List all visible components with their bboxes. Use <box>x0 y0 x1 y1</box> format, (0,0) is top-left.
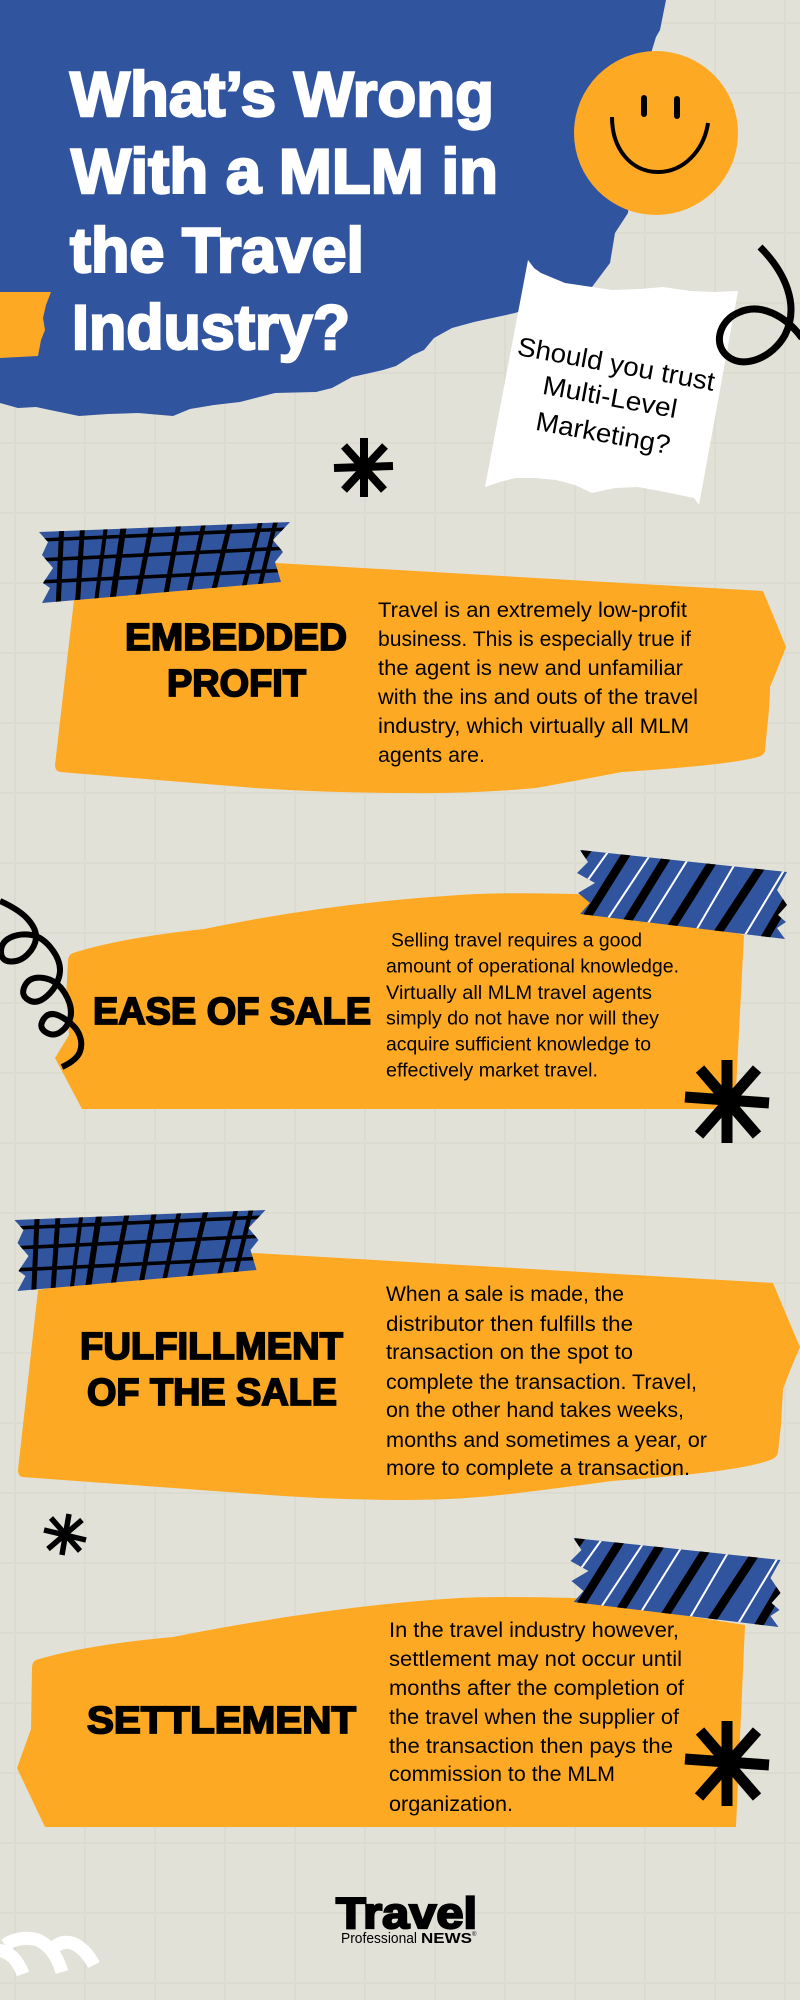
heading: embedded profit <box>125 617 347 705</box>
orange card 2 <box>55 893 744 1109</box>
text: embedded profit body: the agent is new and unfamiliar <box>378 656 683 680</box>
icon: small asterisk <box>44 1514 86 1555</box>
icon: blue grid tape <box>39 522 290 603</box>
heading: settlement: SETTLEMENT <box>87 1700 356 1742</box>
icon: smiley face <box>574 51 738 215</box>
text: ease of sale body: Selling travel requires a good <box>391 930 642 952</box>
orange card 3 <box>18 1253 800 1500</box>
text: embedded profit body: business. This is especially true if <box>378 627 691 651</box>
heading: fulfillment of the sale: FULFILLMENT <box>80 1326 343 1368</box>
orange card 4 <box>17 1597 745 1827</box>
text: settlement body: months after the completion of <box>389 1677 684 1700</box>
icon: blue grid tape <box>14 1210 266 1291</box>
text: settlement body <box>389 1619 684 1816</box>
icon: blue striped tape <box>570 1534 784 1629</box>
text: fulfillment body: more to complete a transaction. <box>386 1457 690 1480</box>
text: settlement body: the travel when the supplier of <box>389 1706 679 1729</box>
text: settlement body: organization. <box>389 1793 513 1816</box>
text: fulfillment body: distributor then fulfills the <box>386 1313 633 1336</box>
callout: torn white note: Marketing? <box>534 406 673 460</box>
title: With a MLM in <box>71 137 498 207</box>
text: settlement body: the transaction then pays the <box>389 1735 673 1758</box>
text: fulfillment body <box>386 1283 707 1480</box>
text: fulfillment body: complete the transaction. Travel, <box>386 1371 697 1394</box>
icon: large asterisk <box>685 1060 769 1143</box>
text: embedded profit body: Travel is an extremely low-profit <box>378 598 687 622</box>
icon: asterisk under header <box>334 438 393 497</box>
logo: Travel Professional News: Professional <box>341 1931 417 1947</box>
text: ease of sale body: amount of operational knowledge. <box>386 956 679 978</box>
text: settlement body: settlement may not occur until <box>389 1648 682 1671</box>
text: fulfillment body: on the other hand takes weeks, <box>386 1399 684 1422</box>
callout: torn white note: Multi-Level <box>540 370 680 424</box>
icon: orange tape at left of header <box>0 292 51 358</box>
text: ease of sale body: simply do not have nor will they <box>386 1008 659 1030</box>
title: What’s Wrong <box>70 60 494 130</box>
text: fulfillment body: months and sometimes a year, or <box>386 1429 707 1452</box>
icon: black curl by note <box>719 247 800 362</box>
icon: black spiral at left <box>0 901 81 1067</box>
text: embedded profit body: agents are. <box>378 743 485 767</box>
text: ease of sale body: effectively market travel. <box>386 1060 598 1082</box>
icon: large asterisk <box>685 1721 769 1806</box>
text: embedded profit body: industry, which virtually all MLM <box>378 714 689 738</box>
panel: fulfillment of the sale <box>14 1204 800 1500</box>
text: embedded profit body <box>377 598 698 767</box>
logo: Travel Professional News: Travel <box>336 1889 477 1938</box>
heading: embedded profit: EMBEDDED <box>125 617 347 659</box>
callout: torn white note: Should you trust <box>515 331 718 397</box>
heading: fulfillment of the sale: OF THE SALE <box>87 1372 337 1414</box>
heading: embedded profit: PROFIT <box>167 663 306 705</box>
panel: embedded profit <box>38 516 786 793</box>
panel: torn blue header <box>0 0 666 416</box>
panel: ease of sale <box>55 846 790 1143</box>
orange card 1 <box>55 563 786 793</box>
text: embedded profit body: with the ins and outs of the travel <box>377 685 698 709</box>
text: ease of sale body: acquire sufficient knowledge to <box>386 1034 651 1056</box>
heading: ease of sale: EASE OF SALE <box>93 991 371 1033</box>
logo: Travel Professional News: ® <box>472 1931 477 1938</box>
text: fulfillment body: When a sale is made, the <box>386 1283 624 1306</box>
text: settlement body: commission to the MLM <box>389 1763 615 1786</box>
logo: Travel Professional News: NEWS <box>421 1931 472 1947</box>
icon: blue striped tape <box>577 846 790 941</box>
heading: fulfillment of the sale <box>80 1326 343 1414</box>
icon: white squiggle bottom left <box>0 1938 94 1974</box>
text: ease of sale body <box>386 930 679 1082</box>
text: ease of sale body: Virtually all MLM travel agents <box>386 982 652 1004</box>
title: the Travel <box>70 216 364 286</box>
text: settlement body: In the travel industry however, <box>389 1619 679 1642</box>
panel: settlement <box>17 1534 784 1827</box>
text: fulfillment body: transaction on the spot to <box>386 1341 633 1364</box>
title: Industry? <box>72 293 350 363</box>
callout: torn white note <box>485 260 738 505</box>
title <box>70 60 498 363</box>
